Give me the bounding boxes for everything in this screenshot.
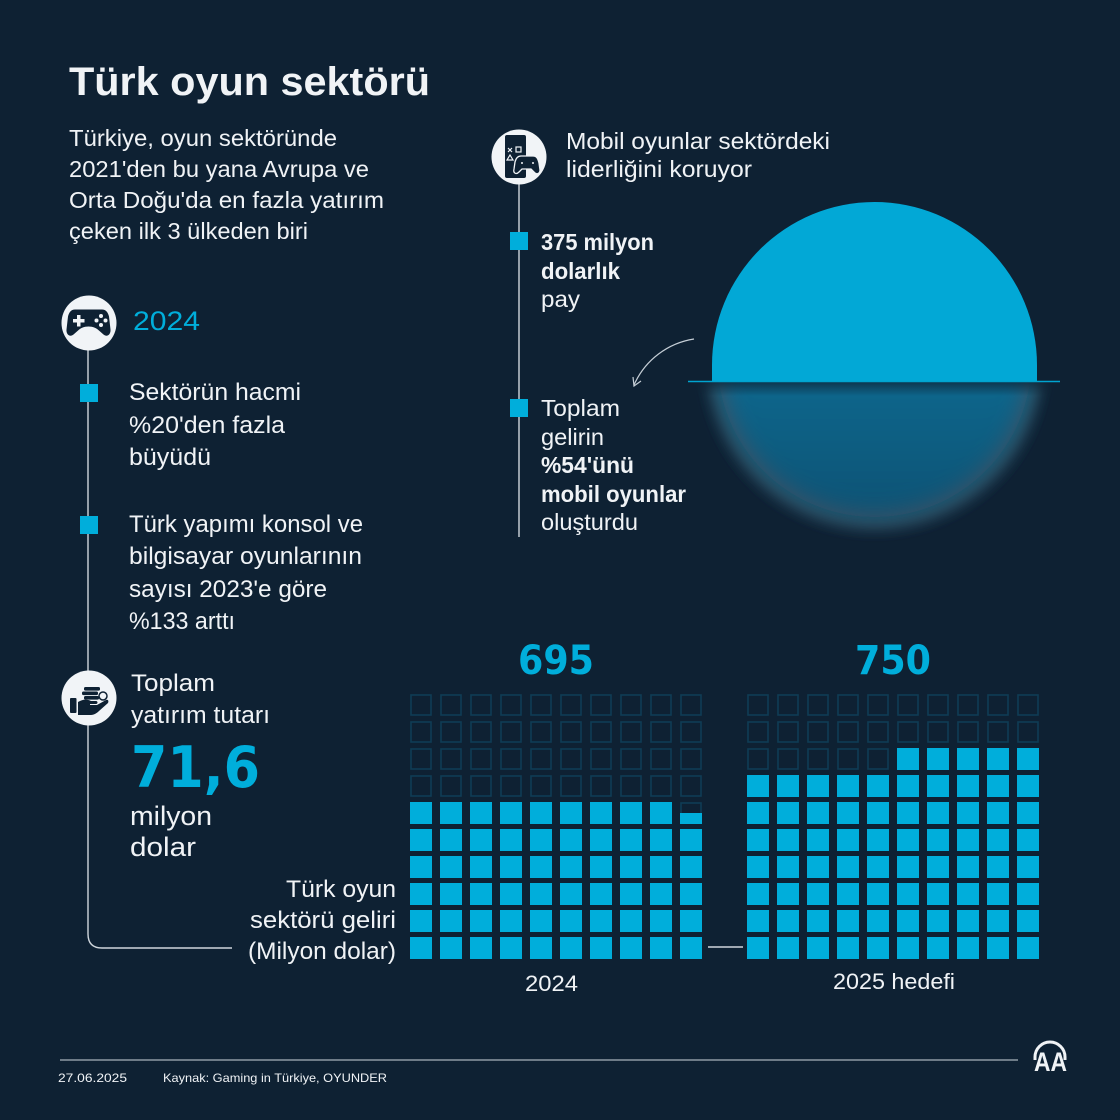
bullet: 54 percent of revenue: Toplam [541,395,620,421]
waffle chart: 2025 target [747,638,1039,994]
intro text: 2021'den bu yana Avrupa ve [69,156,369,182]
intro text [69,125,384,244]
waffle chart: 2024: 695 [518,638,594,684]
timeline line: left [88,340,232,948]
waffle chart: 2024 [410,638,702,996]
bullet: 54 percent of revenue: mobil oyunlar [541,481,686,507]
waffle chart: 2025 target: 750 [855,638,931,684]
chart label: Türk oyun [286,876,396,903]
semicircle chart with reflection [688,202,1060,536]
date: 27.06.2025 [58,1071,127,1085]
bullet: game count: Türk yapımı konsol ve [129,511,363,538]
source: Kaynak: Gaming in Türkiye, OYUNDER [163,1071,387,1085]
intro text: Orta Doğu'da en fazla yatırım [69,187,384,213]
investment total: yatırım tutarı [131,702,270,729]
bullet: volume growth: %20'den fazla [129,412,286,439]
bullet: 375 million share: 375 milyon [541,229,654,255]
arrow [633,339,694,386]
logo: AA: AA [1034,1047,1067,1077]
bullet: volume growth [80,379,301,471]
bullet: volume growth: Sektörün hacmi [129,379,301,406]
year heading: 2024 [133,306,200,336]
icon: game controller [62,296,116,350]
timeline line: right [518,170,520,537]
waffle chart: 2025 target: 2025 hedefi [833,969,955,994]
mobile heading: liderliğini koruyor [566,156,752,182]
connector between charts [708,946,743,948]
mobile heading: Mobil oyunlar sektördeki [566,128,830,154]
bullet: game count [80,511,363,635]
bullet: volume growth: büyüdü [129,444,211,471]
bullet: 54 percent of revenue: oluşturdu [541,509,638,535]
waffle chart: 2024: 2024 [525,971,578,996]
investment total [130,670,270,862]
bullet: game count: bilgisayar oyunlarının [129,543,362,570]
intro text: Türkiye, oyun sektöründe [69,125,337,151]
bullet: 375 million share: pay [541,286,581,312]
footer line [60,1059,1018,1061]
bullet: 54 percent of revenue: gelirin [541,424,604,450]
investment total: Toplam [131,670,215,697]
bullet: game count: sayısı 2023'e göre [129,576,327,603]
icon: mobile phone and controller [492,130,546,184]
investment total: dolar [130,832,196,862]
chart label [248,876,396,965]
intro text: çeken ilk 3 ülkeden biri [69,218,308,244]
title: Türk oyun sektörü [69,60,430,104]
investment total: milyon [130,801,212,831]
investment total: 71,6 [131,735,260,801]
mobile heading [566,128,830,182]
bullet: 54 percent of revenue: %54'ünü [541,452,634,478]
bullet: game count: %133 arttı [129,608,235,635]
chart label: (Milyon dolar) [248,938,396,965]
bullet: 54 percent of revenue [510,395,686,535]
chart label: sektörü geliri [250,907,396,934]
icon: hand with coins [62,670,116,726]
bullet: 375 million share [510,229,654,312]
bullet: 375 million share: dolarlık [541,258,620,284]
